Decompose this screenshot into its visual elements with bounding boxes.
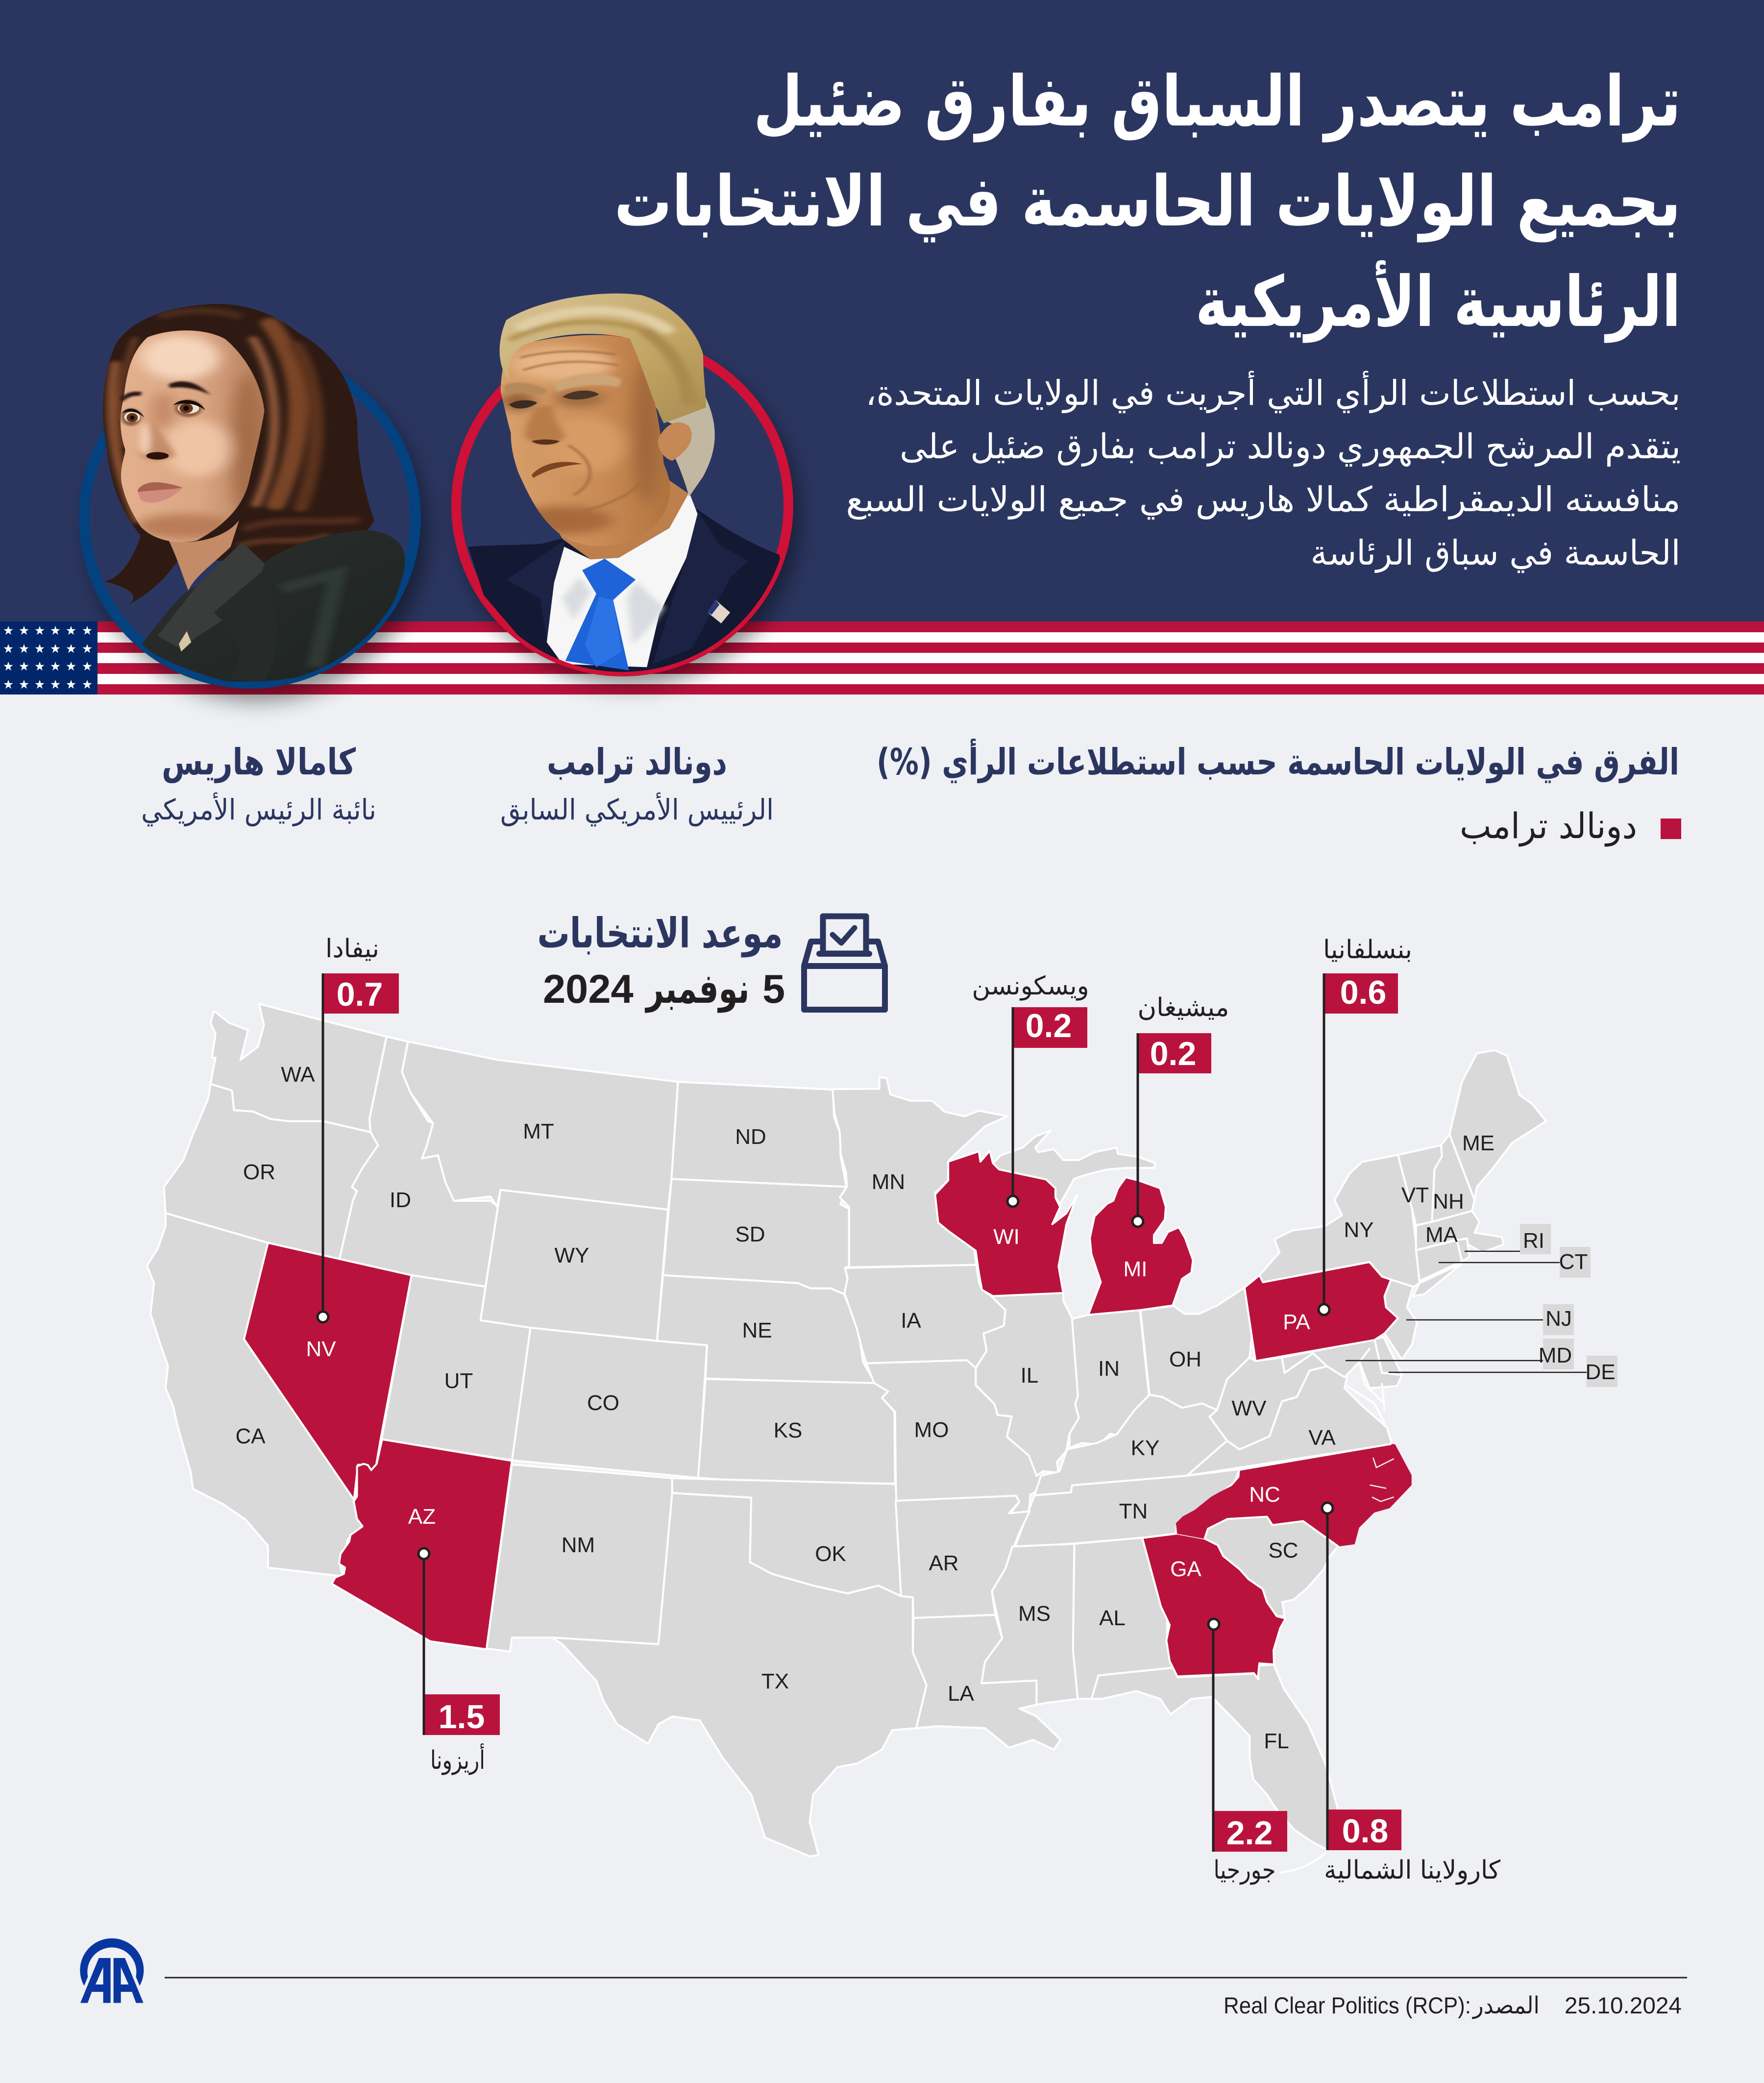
shirt	[547, 492, 698, 667]
callout: North Carolina 0.8: كارولاينا الشمالية	[1324, 1856, 1500, 1885]
header band	[0, 0, 1764, 622]
callout: Nevada 0.7	[318, 934, 399, 1322]
state: Georgia	[1142, 1534, 1286, 1679]
state: South Dakota	[663, 1179, 849, 1294]
state: Missouri	[866, 1360, 1043, 1513]
small-state labels with leader lines: CT	[1559, 1250, 1588, 1274]
central states	[698, 1077, 1193, 1513]
election date text: 5	[762, 966, 785, 1012]
brows and eyes	[121, 381, 210, 426]
state abbreviations: MN	[872, 1170, 905, 1194]
callout: Nevada 0.7: 0.7	[337, 976, 383, 1013]
title	[614, 61, 1681, 343]
north carolina borders	[1204, 1444, 1391, 1546]
state abbreviations: OH	[1169, 1347, 1201, 1371]
state: New Mexico	[487, 1464, 672, 1652]
state: Arizona	[332, 1439, 512, 1649]
state: Florida	[1092, 1664, 1338, 1850]
state: Louisiana	[913, 1615, 1060, 1750]
state abbreviations	[235, 1063, 1494, 1753]
callout: Pennsylvania 0.6	[1319, 935, 1412, 1315]
state: Oklahoma	[672, 1478, 901, 1596]
callout: Pennsylvania 0.6: 0.6	[1340, 974, 1386, 1011]
florida keys	[1280, 1853, 1325, 1873]
source: Real Clear Politics (RCP):	[1224, 1992, 1471, 2018]
callout: Arizona 1.5: أريزونا	[430, 1743, 485, 1775]
election date text: 2024	[543, 966, 634, 1012]
state abbreviations: ME	[1462, 1131, 1494, 1155]
state: Kentucky	[1034, 1395, 1227, 1495]
portrait: Donald Trump	[451, 294, 793, 683]
state abbreviations: VA	[1308, 1426, 1336, 1450]
legend: Donald Trump: دونالد ترامب	[1460, 805, 1637, 847]
state: Rhode Island	[1457, 1239, 1470, 1261]
brows and eyes	[503, 373, 622, 395]
state abbreviations: WI	[993, 1225, 1020, 1249]
state: Nebraska	[657, 1275, 876, 1384]
state: Connecticut	[1416, 1240, 1462, 1281]
callout: Michigan 0.2: 0.2	[1150, 1035, 1196, 1072]
state abbreviations: NE	[742, 1318, 772, 1342]
state: Massachusetts	[1416, 1211, 1503, 1252]
state abbreviations: PA	[1283, 1310, 1310, 1334]
state: Michigan upper peninsula	[993, 1130, 1155, 1204]
eastern states	[1014, 1050, 1546, 1548]
state abbreviations: NH	[1433, 1190, 1464, 1214]
callout: Georgia 2.2: جورجيا	[1213, 1856, 1276, 1885]
state: West Virginia	[1209, 1353, 1327, 1449]
callout: Georgia 2.2	[1208, 1619, 1287, 1885]
state abbreviations: VT	[1401, 1183, 1429, 1207]
election date text: نوفمبر	[645, 965, 750, 1013]
small-state labels with leader lines: NJ	[1545, 1307, 1572, 1331]
state: Colorado	[512, 1328, 707, 1478]
tie	[565, 559, 636, 670]
flag band	[0, 621, 1764, 694]
state: Kansas	[698, 1379, 895, 1484]
state abbreviations: SD	[735, 1222, 765, 1246]
state: Virginia	[1187, 1366, 1392, 1476]
state: Arkansas	[896, 1496, 1029, 1618]
callout: Wisconsin 0.2	[972, 971, 1089, 1207]
state: New York, Long Island	[1413, 1264, 1462, 1296]
neck	[551, 476, 688, 559]
blazer clipped to circle	[141, 530, 405, 682]
caption: Kamala Harris: كامالا هاريس	[162, 741, 356, 783]
callout: Michigan 0.2	[1132, 993, 1229, 1227]
coast detail: Pamlico sound	[1370, 1458, 1394, 1501]
state: Ohio	[1141, 1288, 1252, 1410]
coast detail: Chesapeake Bay	[1347, 1349, 1385, 1423]
state: Iowa	[844, 1265, 1005, 1368]
caption: Donald Trump: دونالد ترامب	[547, 741, 727, 784]
state abbreviations: WY	[555, 1243, 589, 1267]
state: Utah	[382, 1275, 531, 1461]
caption: Kamala Harris	[141, 741, 376, 827]
footer rule	[165, 1977, 1687, 1978]
state: Nevada	[244, 1243, 412, 1500]
state: Texas	[552, 1493, 927, 1856]
state abbreviations: OK	[815, 1542, 846, 1566]
grey back hair	[647, 323, 715, 497]
callout: Michigan 0.2: ميشيغان	[1138, 993, 1229, 1022]
nose	[525, 404, 565, 444]
state abbreviations: AL	[1099, 1606, 1126, 1630]
state: Mississippi	[981, 1544, 1078, 1705]
face	[121, 330, 265, 542]
caption: Kamala Harris: نائبة الرئيس الأمريكي	[141, 792, 376, 827]
intro paragraph: الحاسمة في سباق الرئاسة	[1310, 533, 1681, 573]
caption: Donald Trump	[500, 741, 774, 827]
state: Idaho	[340, 1037, 498, 1287]
state abbreviations: UT	[444, 1369, 473, 1393]
state abbreviations: ND	[735, 1125, 766, 1149]
state abbreviations: TX	[761, 1669, 789, 1693]
state abbreviations: IL	[1021, 1364, 1038, 1388]
ear	[658, 422, 692, 461]
intro paragraph: بحسب استطلاعات الرأي التي أجريت في الولايات المتحدة،	[865, 371, 1681, 414]
callout: North Carolina 0.8: 0.8	[1342, 1812, 1388, 1850]
state abbreviations: SC	[1268, 1538, 1298, 1562]
state abbreviations: NY	[1344, 1218, 1374, 1242]
state abbreviations: IA	[901, 1309, 921, 1333]
caption: Donald Trump: الرئييس الأمريكي السابق	[500, 792, 774, 827]
state: Wyoming	[481, 1190, 668, 1341]
state: New Jersey	[1385, 1280, 1417, 1360]
state abbreviations: TN	[1119, 1499, 1148, 1523]
mouth	[532, 462, 582, 478]
state: Wisconsin	[935, 1151, 1078, 1296]
state: Maryland	[1282, 1339, 1402, 1388]
portrait shadows	[88, 348, 799, 701]
state abbreviations: NV	[306, 1337, 336, 1361]
state: Maine	[1449, 1050, 1546, 1200]
state: California	[147, 1213, 363, 1576]
callout: Pennsylvania 0.6: بنسلفانيا	[1323, 935, 1412, 965]
callout: Wisconsin 0.2: ويسكونسن	[972, 971, 1089, 1001]
date: 25.10.2024	[1565, 1992, 1682, 2018]
icon: ballot box	[804, 917, 885, 1010]
callout: Georgia 2.2: 2.2	[1226, 1814, 1273, 1852]
state: Tennessee	[1014, 1469, 1240, 1548]
state abbreviations: CO	[587, 1391, 619, 1415]
state abbreviations: MS	[1018, 1602, 1051, 1626]
election date text	[537, 909, 785, 1013]
state abbreviations: GA	[1170, 1557, 1201, 1581]
state abbreviations: KY	[1131, 1436, 1159, 1460]
state abbreviations: MO	[914, 1418, 949, 1442]
western states	[147, 1004, 876, 1576]
state abbreviations: AZ	[408, 1505, 436, 1529]
state: New Hampshire	[1432, 1134, 1474, 1222]
state abbreviations: ID	[390, 1188, 411, 1212]
small-state labels with leader lines: MD	[1539, 1343, 1572, 1367]
state abbreviations: IN	[1098, 1357, 1120, 1381]
state: North Dakota	[671, 1082, 847, 1187]
small-state labels with leader lines: DE	[1585, 1360, 1616, 1384]
state abbreviations: AR	[929, 1551, 959, 1575]
callout: Arizona 1.5	[418, 1548, 500, 1775]
state abbreviations: NM	[562, 1533, 595, 1557]
state abbreviations: LA	[948, 1682, 975, 1706]
state abbreviations: WV	[1232, 1396, 1267, 1420]
portrait: Kamala Harris	[79, 304, 421, 689]
state abbreviations: MA	[1425, 1223, 1458, 1247]
source: المصدر	[1472, 1992, 1540, 2019]
flag pin	[708, 600, 730, 623]
state: South Carolina	[1204, 1515, 1338, 1616]
face	[501, 335, 670, 546]
small-state labels with leader lines	[1346, 1224, 1617, 1387]
map of the United States	[147, 934, 1617, 1885]
lips	[138, 482, 183, 492]
nose	[140, 420, 175, 461]
state: Indiana	[1070, 1310, 1149, 1448]
intro paragraph	[846, 371, 1681, 573]
hair mass	[103, 304, 374, 608]
election date text: موعد الانتخابات	[537, 909, 783, 958]
state abbreviations: MT	[523, 1119, 554, 1143]
state: Minnesota	[833, 1077, 1007, 1267]
small-state labels with leader lines: RI	[1523, 1229, 1544, 1253]
state abbreviations: KS	[774, 1418, 802, 1442]
state: North Carolina	[1176, 1444, 1411, 1546]
state: Michigan	[1088, 1177, 1193, 1315]
southern states	[487, 1464, 1338, 1873]
callout: Wisconsin 0.2: 0.2	[1026, 1007, 1072, 1044]
neck	[169, 520, 239, 591]
state abbreviations: NC	[1249, 1483, 1280, 1507]
state abbreviations: WA	[281, 1063, 315, 1087]
state: New York	[1259, 1155, 1420, 1288]
state abbreviations: CA	[235, 1424, 266, 1448]
logo: Anadolu Agency	[80, 1938, 144, 2003]
state: Washington	[211, 1004, 387, 1132]
intro paragraph: يتقدم المرشح الجمهوري دونالد ترامب بفارق ضئيل على	[900, 426, 1681, 467]
intro paragraph: منافسته الديمقراطية كمالا هاريس في جميع الولايات السبع	[846, 479, 1681, 520]
state: Vermont	[1398, 1145, 1442, 1225]
hair	[500, 294, 706, 423]
callout: North Carolina 0.8	[1322, 1503, 1500, 1885]
state: Delaware	[1374, 1337, 1402, 1375]
state: Oregon	[164, 1084, 378, 1259]
callout: Nevada 0.7: نيفادا	[325, 934, 379, 964]
jacket	[468, 509, 787, 683]
state: Pennsylvania	[1245, 1262, 1398, 1361]
state: Illinois	[976, 1293, 1079, 1476]
state: Montana	[402, 1042, 678, 1210]
state: Alabama	[1073, 1537, 1174, 1699]
hair highlights	[112, 311, 354, 545]
state abbreviations: MI	[1124, 1257, 1147, 1281]
callout: Arizona 1.5: 1.5	[439, 1698, 485, 1736]
state abbreviations: OR	[243, 1160, 275, 1184]
state abbreviations: FL	[1264, 1729, 1289, 1753]
